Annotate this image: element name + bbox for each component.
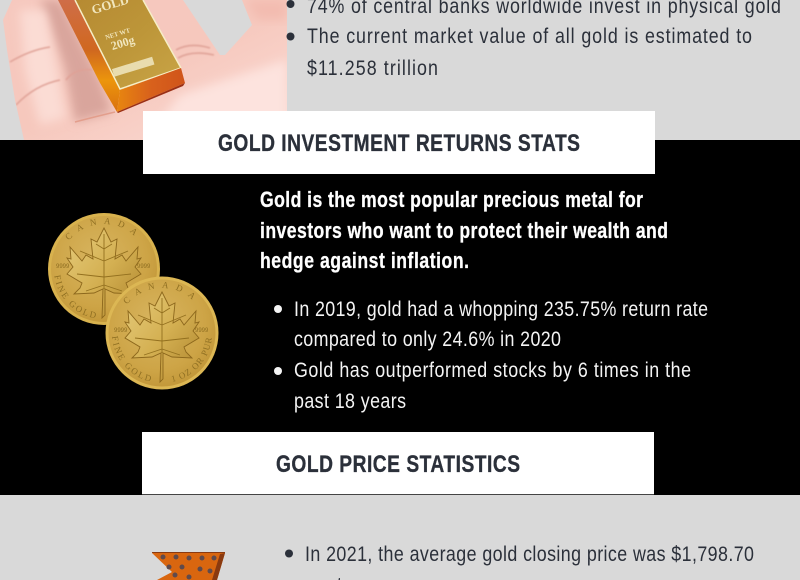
coin front: CANADA xyxy=(124,282,194,304)
returns bullet list: In 2019, gold had a whopping 235.75% return rate xyxy=(294,298,708,321)
panel: black investment returns band xyxy=(0,140,800,495)
gold bar left side xyxy=(58,0,120,112)
grey top band xyxy=(0,0,800,141)
coin front: FINE GOLD xyxy=(112,336,151,381)
top bullet list: The current market value of all gold is estimated to xyxy=(307,25,752,48)
heading: gold investment returns stats: GOLD INVESTMENT RETURNS STATS xyxy=(218,129,580,157)
returns bullet list: Gold has outperformed stocks by 6 times in the xyxy=(294,359,691,382)
coin back: 9999 xyxy=(56,264,70,270)
price bullet list xyxy=(285,543,754,580)
panel: grey price band xyxy=(0,495,800,580)
intro statement: Gold is the most popular precious metal for xyxy=(260,188,643,213)
heading: gold price statistics xyxy=(142,432,654,495)
coin front: 1 OZ OR PUR xyxy=(172,338,212,382)
hand xyxy=(3,0,287,140)
icon: orange studded arrow xyxy=(152,552,225,580)
bar engraving: NET WT xyxy=(105,27,132,41)
icon: hand holding gold bar xyxy=(3,0,287,140)
intro statement xyxy=(260,188,668,274)
coin back: FINE GOLD xyxy=(54,274,96,318)
intro statement: investors who want to protect their wealth and xyxy=(260,219,668,244)
top bullet list: $11.258 trillion xyxy=(307,57,438,80)
bar engraving xyxy=(90,0,154,77)
coin back: 9999 xyxy=(137,264,151,270)
coin front xyxy=(106,276,218,390)
heading: gold price statistics: GOLD PRICE STATISTICS xyxy=(276,450,520,478)
coin back xyxy=(48,213,160,325)
returns bullet list: past 18 years xyxy=(294,390,406,413)
returns bullet list: compared to only 24.6% in 2020 xyxy=(294,328,561,351)
gold bar end face xyxy=(117,68,185,112)
heading: gold investment returns stats xyxy=(143,111,655,174)
icon: gold maple leaf coins xyxy=(48,213,218,390)
coin front: 9999 xyxy=(114,328,128,334)
price bullet list: In 2021, the average gold closing price was $1,798.70 xyxy=(305,543,754,566)
top bullet list xyxy=(286,0,781,80)
gold bar top face xyxy=(75,0,181,90)
returns bullet list xyxy=(274,298,708,413)
intro statement: hedge against inflation. xyxy=(260,249,469,274)
coin back: CANADA xyxy=(66,218,136,240)
bar engraving: 200g xyxy=(109,33,136,53)
coin front: 9999 xyxy=(195,328,209,334)
